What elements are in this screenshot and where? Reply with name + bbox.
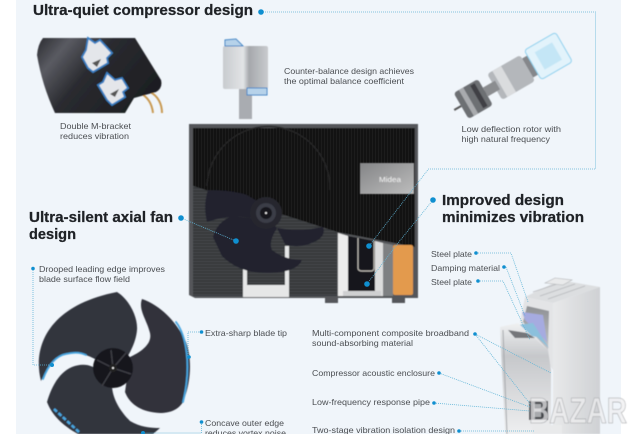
- heading: ultra-silent axial fan: design: [29, 227, 76, 243]
- outdoor unit cutaway: [189, 124, 418, 303]
- label: composite material: Multi-component composite broadband: [312, 328, 469, 338]
- label: vibration isolation: Two-stage vibration isolation design: [312, 425, 455, 435]
- label: response pipe: Low-frequency response pipe: [312, 397, 430, 407]
- label: acoustic enclosure: Compressor acoustic enclosure: [312, 368, 435, 378]
- callout lines: [434, 253, 551, 431]
- label: double M-bracket: Double M-bracket: [60, 121, 132, 131]
- callout line: improved design: [364, 197, 436, 287]
- label: drooped leading edge: blade surface flow field: [39, 274, 130, 284]
- fan blades in unit: [205, 190, 324, 273]
- label: extra-sharp blade tip: [187, 328, 287, 359]
- heading: ultra-quiet compressor design: Ultra-quiet compressor design: [33, 3, 253, 19]
- heading: ultra-silent axial fan: Ultra-silent axial fan: [29, 210, 173, 226]
- label: composite material: sound-absorbing material: [312, 338, 413, 348]
- callout line: compressor design: [258, 9, 596, 249]
- blue blade edges: [43, 322, 187, 402]
- callout dots: [432, 251, 506, 433]
- blade: upper left: [39, 292, 137, 381]
- bottom white strip: [0, 434, 640, 437]
- fan shroud arc: [207, 126, 330, 190]
- illustration: counter-balance crankshaft: [223, 39, 268, 119]
- label: drooped leading edge: [31, 264, 165, 367]
- callout line: axial fan: [178, 215, 239, 244]
- compressor section: [338, 233, 393, 296]
- label: low deflection rotor: high natural frequency: [462, 134, 551, 144]
- label: extra-sharp blade tip: Extra-sharp blade tip: [205, 328, 287, 338]
- label: steel plate 1: Steel plate: [431, 249, 472, 259]
- label: concave outer edge: Concave outer edge: [205, 418, 284, 428]
- fin section (upper): [193, 128, 415, 247]
- cabinet side: [553, 287, 600, 434]
- label: counter-balance: the optimal balance coefficient: [284, 76, 405, 86]
- label: drooped leading edge: Drooped leading edge improves: [39, 264, 165, 274]
- Midea plate: [360, 163, 414, 194]
- heading: improved design: minimizes vibration: [442, 210, 584, 226]
- compressor compartment: [529, 401, 548, 420]
- motor bracket: [243, 246, 289, 297]
- cabinet top: [525, 280, 600, 303]
- label: counter-balance: Counter-balance design achieves: [284, 66, 414, 76]
- label: low deflection rotor: Low deflection rotor with: [462, 124, 561, 134]
- illustration: double M-bracket compressor: [37, 38, 162, 113]
- inner opening: [523, 306, 549, 350]
- labels and callouts: enclosure layers: [312, 249, 551, 435]
- layer plates: [522, 312, 547, 342]
- illustration: axial fan: [39, 292, 190, 434]
- cabinet front: [500, 323, 551, 434]
- label: concave outer edge: [141, 418, 286, 437]
- fan hub in unit: [250, 197, 282, 229]
- heading: improved design: Improved design: [442, 193, 564, 209]
- blade: right: [125, 299, 190, 413]
- label: steel plate 2: Steel plate: [431, 277, 472, 287]
- back panel frame: [520, 297, 553, 370]
- blade: bottom: [47, 365, 160, 434]
- illustration: layered enclosure cabinet: [500, 278, 600, 434]
- unit casing: [189, 124, 418, 303]
- fan hub: [93, 348, 133, 388]
- label: double M-bracket: reduces vibration: [60, 131, 129, 141]
- cutaway lower-left section: [193, 186, 337, 296]
- label: damping material: Damping material: [431, 263, 500, 273]
- Midea plate: Midea: [379, 177, 401, 184]
- illustration: low deflection rotor: [447, 32, 572, 123]
- orange sound-absorbing block: [393, 245, 413, 295]
